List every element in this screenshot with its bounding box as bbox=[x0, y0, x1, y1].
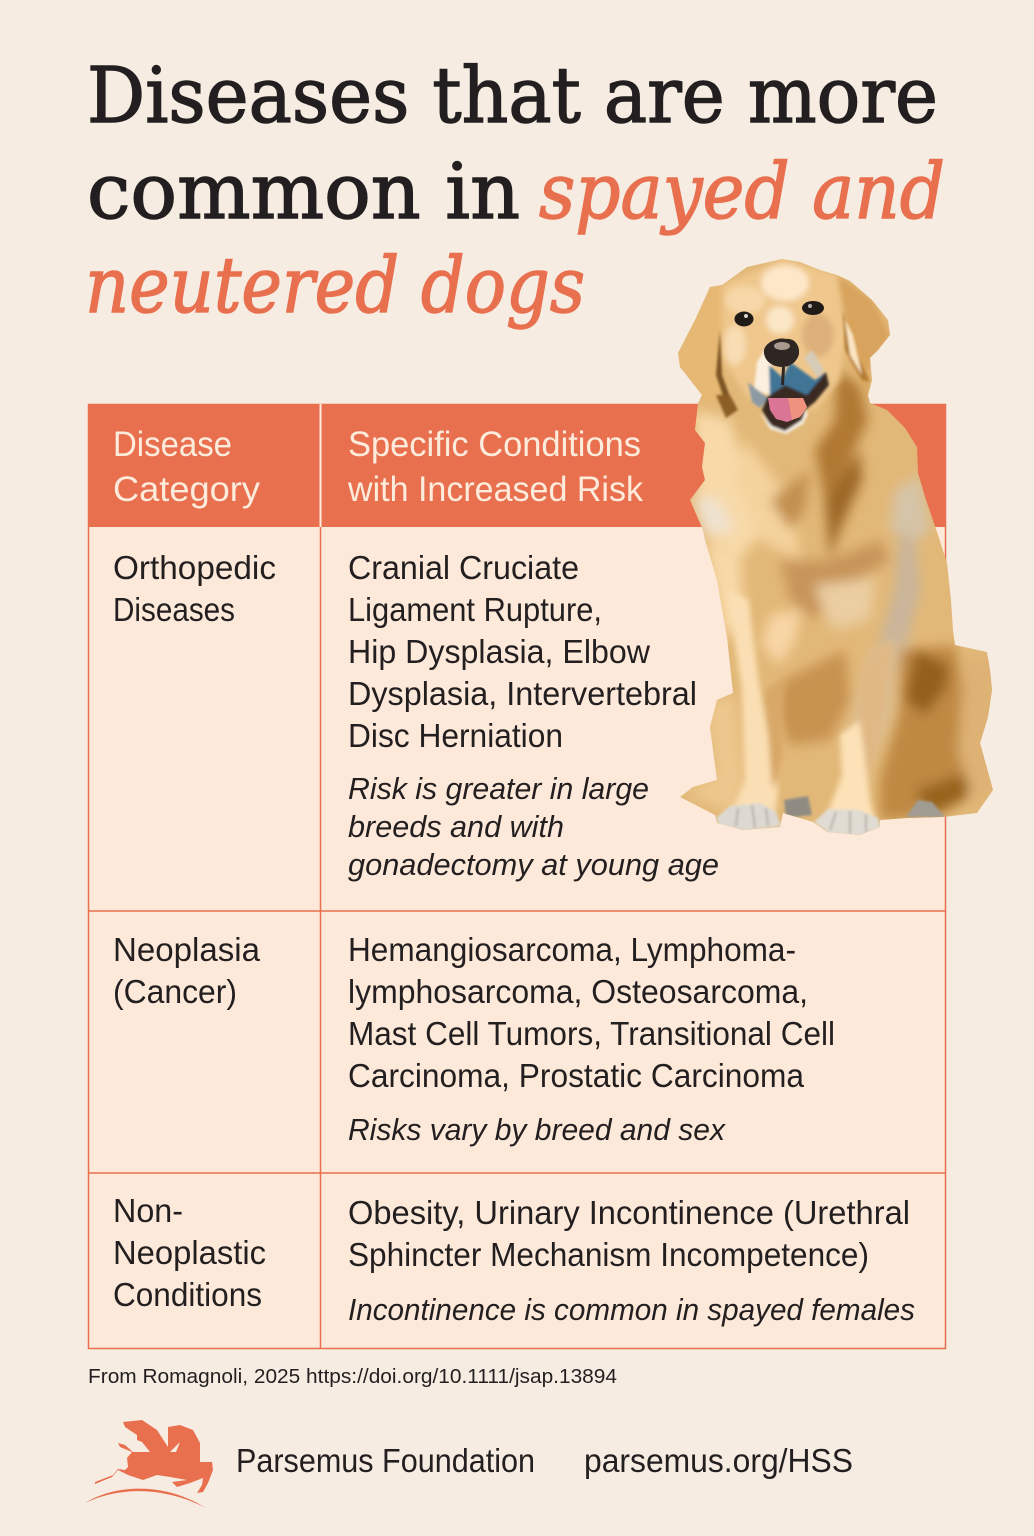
header: disease category bbox=[113, 425, 261, 509]
title bbox=[85, 52, 945, 331]
eyes bbox=[734, 312, 754, 326]
illustration: golden retriever bbox=[670, 250, 1000, 840]
title: neutered dogs bbox=[85, 242, 585, 331]
row 1 note: gonadectomy at young age bbox=[348, 847, 719, 882]
row 1 category: orthopedic: Diseases bbox=[113, 591, 235, 628]
right haunch bbox=[880, 645, 975, 820]
chest shadows bbox=[815, 370, 868, 500]
row 2 conditions: Hemangiosarcoma, Lymphoma- bbox=[348, 931, 796, 968]
tongue bbox=[768, 398, 807, 422]
title: common in bbox=[87, 148, 520, 237]
lower lip bbox=[760, 410, 808, 434]
row 1 conditions: Cranial Cruciate bbox=[348, 549, 579, 586]
ears bbox=[678, 285, 723, 402]
footer: organisation name: Parsemus Foundation bbox=[236, 1442, 535, 1479]
header: disease category: Disease bbox=[113, 425, 232, 464]
row 2 conditions: lymphosarcoma, Osteosarcoma, bbox=[348, 973, 808, 1010]
title: Diseases that are more bbox=[87, 52, 938, 141]
row 1 category: orthopedic bbox=[113, 549, 276, 628]
row 1 conditions: Disc Herniation bbox=[348, 717, 563, 754]
table header band bbox=[88, 404, 946, 527]
row 3 category: non-neoplastic: Conditions bbox=[113, 1276, 262, 1313]
muzzle blue bbox=[769, 362, 826, 398]
row 2 conditions: Carcinoma, Prostatic Carcinoma bbox=[348, 1057, 805, 1094]
left haunch bbox=[692, 696, 744, 811]
row 3 conditions: Sphincter Mechanism Incompetence) bbox=[348, 1236, 869, 1273]
row 1 note: breeds and with bbox=[348, 809, 564, 844]
row 2 note: Risks vary by breed and sex bbox=[348, 1112, 726, 1147]
row 1 conditions bbox=[348, 549, 697, 754]
paws bbox=[716, 796, 945, 836]
row 2 conditions: Mast Cell Tumors, Transitional Cell bbox=[348, 1015, 835, 1052]
footer: website: parsemus.org/HSS bbox=[584, 1442, 853, 1479]
row 1 conditions: Dysplasia, Intervertebral bbox=[348, 675, 697, 712]
legs bbox=[727, 590, 778, 815]
row 3 conditions bbox=[348, 1194, 910, 1273]
row 1 category: orthopedic: Orthopedic bbox=[113, 549, 276, 586]
panel: disease table bbox=[88, 404, 946, 1349]
row 2 category: neoplasia bbox=[113, 931, 261, 1010]
pegasus silhouette bbox=[95, 1420, 213, 1493]
mouth bbox=[762, 372, 829, 432]
table body background bbox=[88, 404, 946, 1348]
light ruff bbox=[695, 410, 770, 560]
header: specific conditions bbox=[347, 425, 643, 509]
row 1 note: Risk is greater in large bbox=[348, 771, 649, 806]
nose bbox=[764, 339, 799, 367]
title: spayed and bbox=[539, 148, 945, 237]
head bbox=[722, 259, 846, 410]
header: disease category: Category bbox=[113, 470, 261, 509]
ground arc bbox=[85, 1489, 206, 1508]
row 1 conditions: Ligament Rupture, bbox=[348, 591, 602, 628]
row 3 category: non-neoplastic: Neoplastic bbox=[113, 1234, 266, 1271]
row 3 note: Incontinence is common in spayed females bbox=[348, 1292, 915, 1327]
header: specific conditions: with Increased Risk bbox=[347, 470, 643, 509]
row 1 conditions: Hip Dysplasia, Elbow bbox=[348, 633, 650, 670]
row 2 conditions bbox=[348, 931, 835, 1094]
ear creases bbox=[714, 332, 730, 397]
row 3 conditions: Obesity, Urinary Incontinence (Urethral bbox=[348, 1194, 910, 1231]
row 3 category: non-neoplastic: Non- bbox=[113, 1192, 183, 1229]
row 2 category: neoplasia: Neoplasia bbox=[113, 931, 261, 968]
citation: From Romagnoli, 2025 https://doi.org/10.1111/jsap.13894 bbox=[88, 1366, 617, 1388]
grey patches bbox=[692, 495, 735, 535]
row 2 category: neoplasia: (Cancer) bbox=[113, 973, 237, 1010]
header: specific conditions: Specific Conditions bbox=[348, 425, 641, 464]
row 1 note bbox=[348, 771, 719, 882]
row 3 category: non-neoplastic bbox=[113, 1192, 266, 1313]
blaze bbox=[754, 345, 772, 395]
icon: Parsemus pegasus logo bbox=[85, 1420, 213, 1508]
